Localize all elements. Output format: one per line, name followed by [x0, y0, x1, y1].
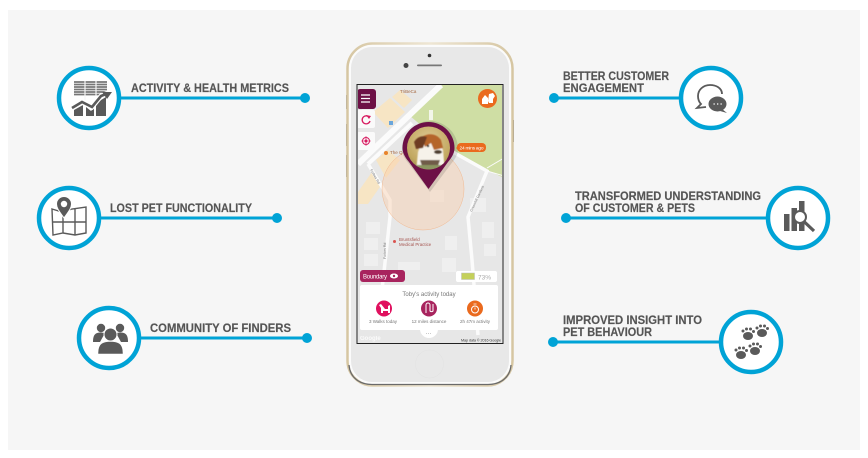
faint blocks	[376, 110, 377, 111]
dog pin	[402, 121, 458, 192]
park	[410, 85, 504, 178]
item: community of finders	[79, 308, 312, 368]
item: transformed understanding	[561, 188, 828, 248]
pet logo badge	[478, 89, 497, 108]
roads	[358, 85, 504, 335]
icon: bars and magnifier	[784, 201, 814, 231]
buildings	[358, 173, 380, 204]
label: COMMUNITY OF FINDERS	[150, 323, 291, 335]
boundary button	[360, 270, 405, 282]
map labels: TriBeCa	[400, 89, 417, 94]
map attribution: Google	[360, 336, 381, 342]
time badge	[456, 143, 486, 152]
icon: speech bubbles	[697, 85, 727, 113]
icon: chart table	[72, 81, 112, 116]
item: lost pet functionality	[39, 188, 282, 248]
phone body	[346, 44, 514, 386]
stat: activity: 2h 47m activity	[460, 319, 491, 324]
map labels: Forbes Rd	[369, 168, 381, 185]
map labels: Bruntsfield	[399, 237, 420, 242]
map labels	[369, 89, 485, 259]
label: LOST PET FUNCTIONALITY	[110, 203, 252, 215]
map labels: Greenhill Gardens	[469, 185, 485, 212]
map attribution	[360, 336, 501, 342]
locate button	[357, 132, 375, 150]
item: better customer engagement	[549, 68, 741, 128]
item: improved insight: PET BEHAVIOUR	[563, 327, 653, 339]
label: IMPROVED INSIGHT INTO	[563, 315, 702, 327]
boundary button: Boundary	[363, 274, 387, 280]
icon: map and pin	[52, 196, 86, 235]
stat: walks: 3 Walks today	[369, 319, 398, 324]
map labels: The Q	[390, 150, 403, 155]
item: better customer engagement: ENGAGEMENT	[563, 83, 644, 95]
phone	[346, 44, 514, 386]
label: TRANSFORMED UNDERSTANDING	[575, 191, 761, 203]
screen frame	[357, 84, 503, 344]
time badge: 24 mins ago	[460, 146, 484, 152]
label: BETTER CUSTOMER	[563, 71, 670, 83]
stat: distance: 12 miles distance	[412, 319, 447, 324]
refresh button	[357, 110, 375, 128]
map attribution: Map data © 2016 Google	[461, 338, 501, 342]
icon: people group	[93, 324, 128, 354]
battery: 73%	[478, 274, 491, 282]
menu button	[357, 89, 376, 109]
item: activity and health metrics	[59, 68, 310, 128]
activity card	[360, 285, 498, 338]
map labels: Medical Practice	[399, 242, 432, 247]
item: transformed understanding: OF CUSTOMER & PETS	[575, 203, 695, 215]
boundary circle	[382, 148, 464, 230]
item: improved insight	[548, 312, 781, 372]
activity card: Toby's activity today	[402, 292, 456, 298]
battery	[456, 271, 497, 282]
screen map	[357, 84, 504, 345]
label: ACTIVITY & HEALTH METRICS	[131, 83, 289, 95]
dog photo	[414, 134, 445, 170]
home button	[416, 350, 444, 378]
icon: paw prints	[734, 324, 769, 359]
map labels: Forbes Rd	[383, 243, 387, 259]
